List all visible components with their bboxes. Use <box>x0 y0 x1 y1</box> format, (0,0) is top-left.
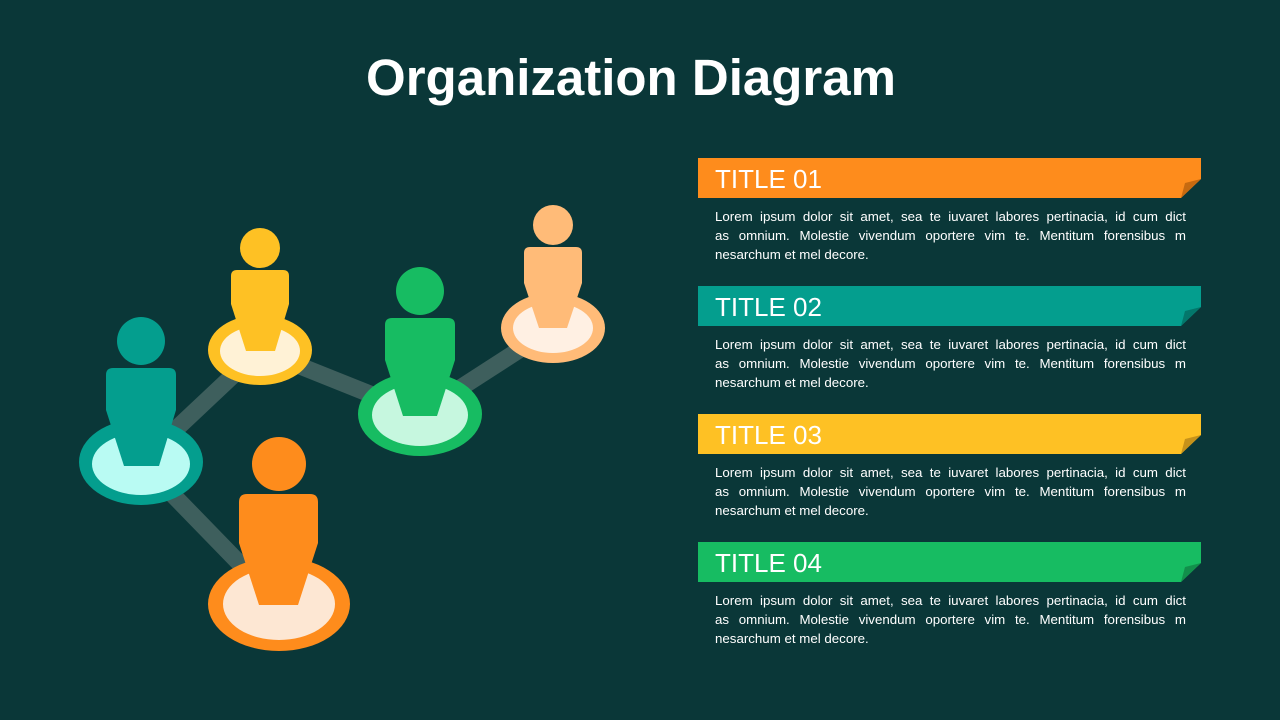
text block 02 <box>715 337 1186 390</box>
text block 04: nesarchum et mel decore. <box>715 631 869 646</box>
panel: title 02: TITLE 02 <box>715 292 822 322</box>
panel: title 01 <box>698 158 1201 262</box>
banner 04 <box>698 542 1201 582</box>
person: yellow <box>208 228 312 385</box>
banner 03 <box>698 414 1201 454</box>
text block 01: Lorem ipsum dolor sit amet, sea te iuvaret labores pertinacia, id cum dict <box>715 209 1186 224</box>
panel: title 03: TITLE 03 <box>715 420 822 450</box>
text block 04: Lorem ipsum dolor sit amet, sea te iuvaret labores pertinacia, id cum dict <box>715 593 1186 608</box>
person: orange <box>208 437 350 651</box>
text block 04 <box>715 593 1186 646</box>
connectors <box>141 328 553 604</box>
banner 02 <box>698 286 1201 326</box>
person: teal <box>79 317 203 505</box>
person: green <box>358 267 482 456</box>
panel: title 04: TITLE 04 <box>715 548 822 578</box>
banner 01 <box>698 158 1201 198</box>
text block 03 <box>715 465 1186 518</box>
text block 02: nesarchum et mel decore. <box>715 375 869 390</box>
text block 03: as omnium. Molestie vivendum oportere vim te. Mentitum forensibus m <box>715 484 1186 499</box>
text block 01: nesarchum et mel decore. <box>715 247 869 262</box>
panel: title 01: TITLE 01 <box>715 164 822 194</box>
person: peach <box>501 205 605 363</box>
text block 01 <box>715 209 1186 262</box>
text block 03: nesarchum et mel decore. <box>715 503 869 518</box>
panel: title 04 <box>698 542 1201 646</box>
title: Organization Diagram <box>366 49 896 106</box>
panel: title 03 <box>698 414 1201 518</box>
text block 01: as omnium. Molestie vivendum oportere vim te. Mentitum forensibus m <box>715 228 1186 243</box>
text block 02: Lorem ipsum dolor sit amet, sea te iuvaret labores pertinacia, id cum dict <box>715 337 1186 352</box>
diagram: people network <box>79 205 605 651</box>
panel: title 02 <box>698 286 1201 390</box>
text block 04: as omnium. Molestie vivendum oportere vim te. Mentitum forensibus m <box>715 612 1186 627</box>
text block 03: Lorem ipsum dolor sit amet, sea te iuvaret labores pertinacia, id cum dict <box>715 465 1186 480</box>
text block 02: as omnium. Molestie vivendum oportere vim te. Mentitum forensibus m <box>715 356 1186 371</box>
